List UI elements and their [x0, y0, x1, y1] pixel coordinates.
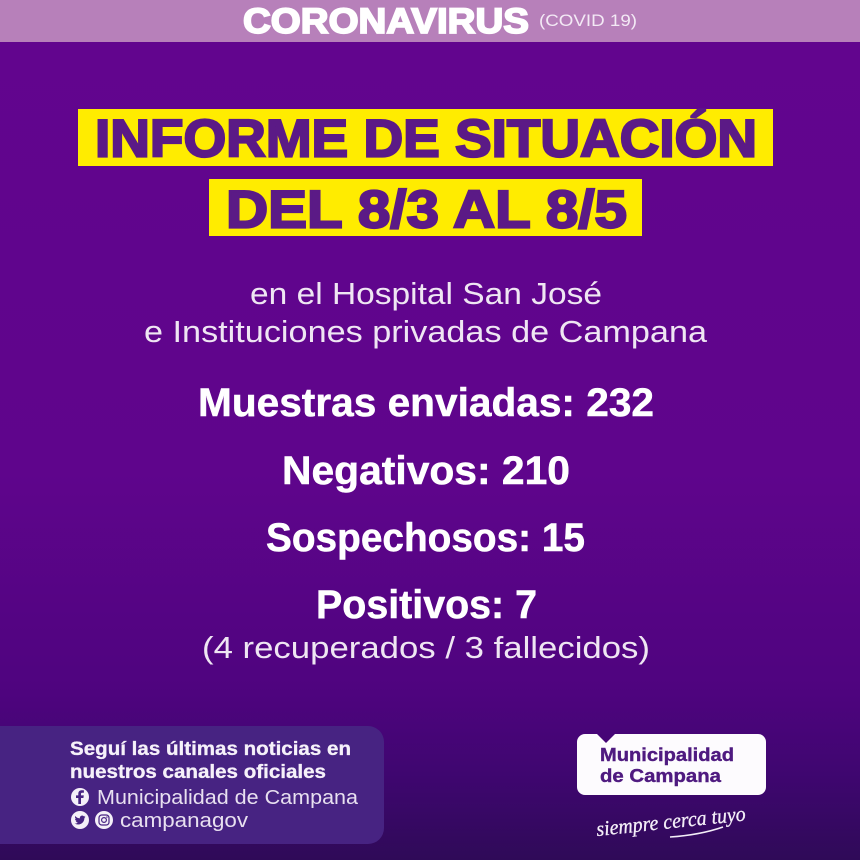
title line 2: DEL 8/3 AL 8/5 [226, 180, 627, 240]
header subtitle: (COVID 19) [539, 11, 637, 30]
icon: twitter [71, 811, 89, 829]
logo: Municipalidad de Campana [577, 734, 766, 795]
slogan: siempre cerca tuyo [595, 801, 747, 841]
positivos detail: (4 recuperados / 3 fallecidos) [202, 630, 650, 665]
stat: negativos: Negativos: 210 [282, 449, 570, 493]
facebook name: Municipalidad de Campana [97, 787, 359, 809]
panel heading: nuestros canales oficiales [70, 762, 326, 783]
stat: muestras enviadas: Muestras enviadas: 232 [198, 381, 654, 425]
subtitle: en el Hospital San José [250, 276, 602, 311]
social handle: campanagov [120, 810, 248, 832]
logo: Municipalidad de Campana: de Campana [600, 765, 722, 786]
icon: facebook [71, 788, 89, 806]
panel: social channels [0, 726, 384, 844]
stat: positivos: Positivos: 7 [316, 583, 537, 627]
icon: instagram [95, 811, 113, 829]
subtitle [144, 276, 708, 349]
title line 1: INFORME DE SITUACIÓN [95, 110, 757, 168]
logo: Municipalidad de Campana: Municipalidad [600, 744, 734, 765]
subtitle: e Instituciones privadas de Campana [144, 314, 708, 349]
stat: sospechosos: Sospechosos: 15 [266, 516, 585, 560]
header band [0, 0, 860, 42]
panel heading: Seguí las últimas noticias en [70, 739, 351, 760]
header title: CORONAVIRUS [243, 1, 529, 41]
panel heading [70, 739, 351, 783]
